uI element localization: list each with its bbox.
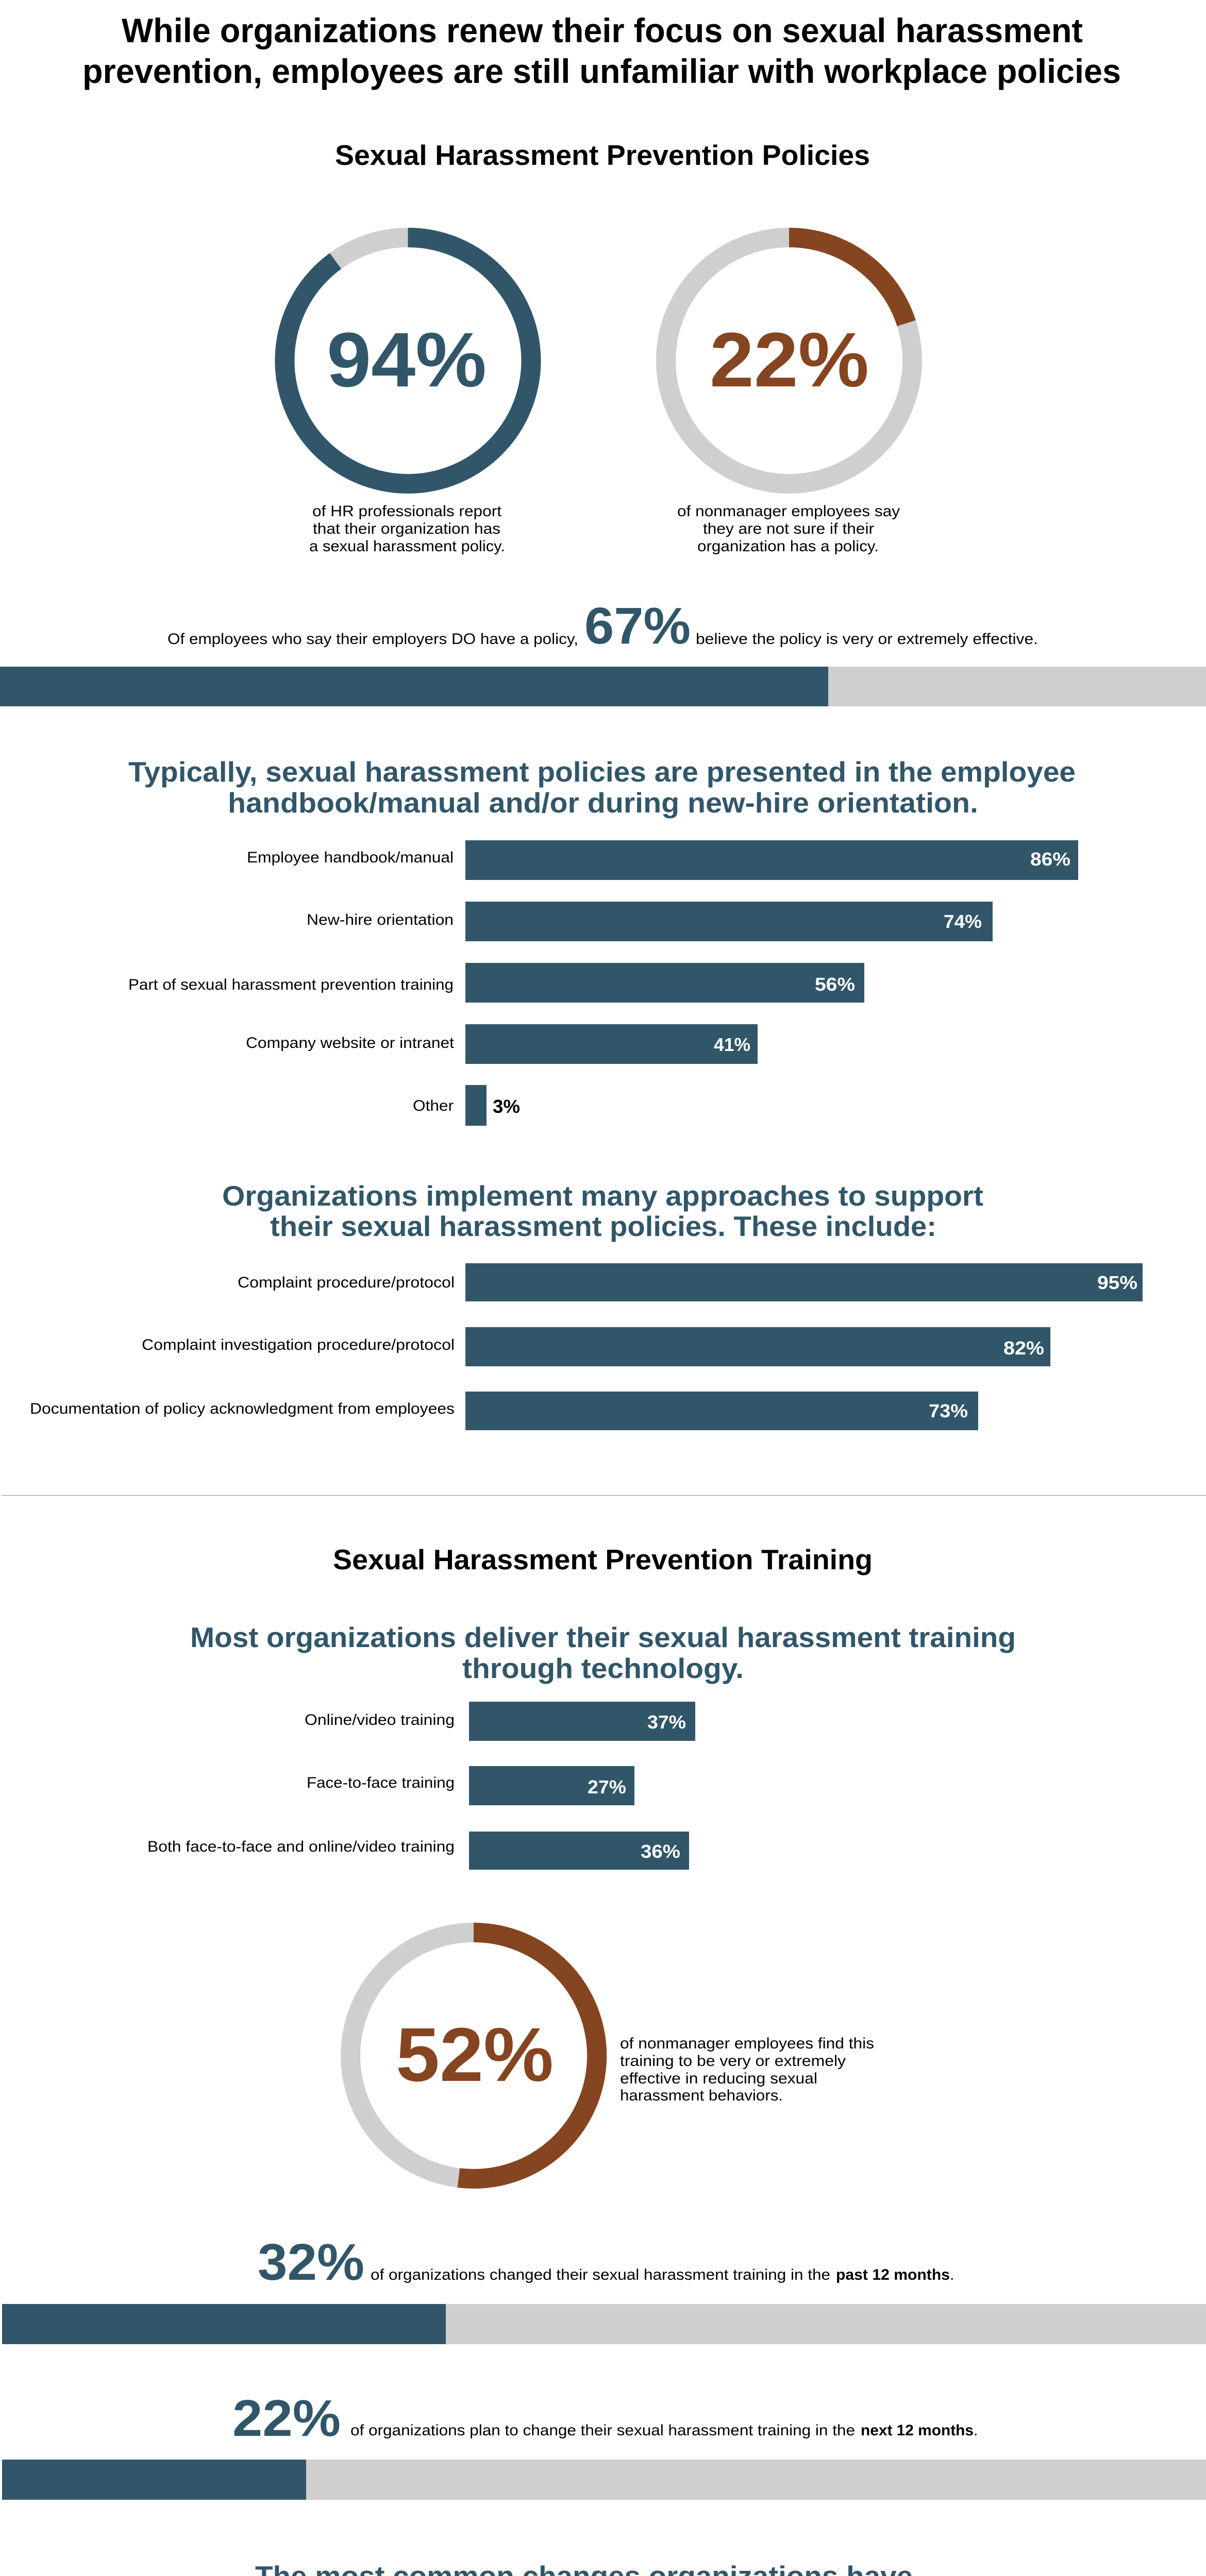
progress bar: 32% [2,2304,1206,2344]
heading: policy presentation: Typically, sexual harassment policies are presented in the employee [128,756,1076,788]
caption: 94% [309,503,505,555]
donut chart: 22% nonmanager employees: 22% [710,316,869,403]
heading: approaches: Organizations implement many approaches to support [222,1180,983,1212]
heading: training delivery: Most organizations deliver their sexual harassment training [190,1621,1016,1653]
heading: training delivery: through technology. [462,1652,744,1684]
bar: complaint investigation 82%: 82% [1003,1337,1044,1359]
bar: face-to-face 27%: Face-to-face training [307,1774,455,1791]
callout: 22% plan to change: of organizations plan to change their sexual harassment training in the [350,2422,855,2439]
caption: 94%: a sexual harassment policy. [309,538,505,555]
bar: both 36%: 36% [641,1841,680,1862]
donut chart: 94% HR professionals [284,238,531,484]
caption: 22% [677,503,900,555]
bar: online 37%: Online/video training [305,1711,455,1728]
donut chart: 52% training effective: 52% [396,2012,554,2097]
callout: 22% plan to change [232,2389,978,2447]
bar: complaint procedure 95% [238,1263,1143,1301]
caption: 94%: that their organization has [313,520,500,537]
bar: complaint procedure 95%: Complaint procedure/protocol [238,1274,455,1291]
heading: approaches [222,1180,983,1242]
heading: policy presentation [128,756,1076,819]
heading: training delivery [190,1621,1016,1684]
title: While organizations renew their focus on sexual harassment [122,11,1083,49]
callout: 67% policy effective: believe the policy is very or extremely effective. [696,631,1038,648]
bar: new-hire orientation 74%: 74% [944,911,982,932]
caption: 22%: they are not sure if their [703,520,874,537]
bar: company website 41% [246,1024,758,1064]
callout: 32% changed training: past 12 months [836,2266,950,2283]
callout: 22% plan to change: next 12 months [861,2422,974,2439]
bar: documentation 73% [30,1392,978,1430]
bar: face-to-face 27%: 27% [588,1776,626,1798]
bar: new-hire orientation 74%: New-hire orientation [307,911,454,928]
bar: company website 41%: 41% [714,1034,750,1055]
caption: 52%: training to be very or extremely [620,2053,846,2070]
progress bar: 22% [2,2460,1206,2500]
caption: 22%: organization has a policy. [697,538,879,555]
bar chart: how policies are presented [128,840,1078,1126]
bar: documentation 73%: 73% [929,1400,968,1421]
bar: online 37% [305,1702,695,1741]
donut chart: 22% nonmanager employees [666,238,912,484]
callout: 67% policy effective: 67% [584,597,691,655]
bar: complaint investigation 82% [142,1327,1050,1366]
bar: new-hire orientation 74% [307,902,993,941]
caption: 94%: of HR professionals report [312,503,502,520]
title: prevention, employees are still unfamiliar with workplace policies [82,52,1121,90]
callout: 32% changed training: of organizations changed their sexual harassment training in the [371,2266,830,2283]
bar: online 37%: 37% [647,1711,686,1733]
bar: prevention training 56% [128,963,864,1003]
heading: approaches: their sexual harassment policies. These include: [270,1210,936,1242]
donut chart: 94% HR professionals: 94% [327,316,487,403]
bar: both 36% [147,1832,689,1870]
caption: 22%: of nonmanager employees say [677,503,900,520]
callout: 32% changed training [258,2233,954,2291]
bar: other 3%: Other [413,1097,454,1114]
caption: 52%: of nonmanager employees find this [620,2035,874,2052]
bar: complaint procedure 95%: 95% [1097,1272,1137,1293]
callout: 32% changed training: . [950,2266,954,2283]
caption: 52%: harassment behaviors. [620,2087,783,2104]
bar: employee handbook 86%: Employee handbook/manual [247,849,454,866]
bar chart: approaches [30,1263,1143,1430]
caption: 52% [620,2035,874,2104]
bar: face-to-face 27% [307,1766,634,1805]
bar: prevention training 56%: 56% [815,974,855,995]
callout: 67% policy effective: Of employees who say their employers DO have a policy, [167,631,578,648]
bar chart: training delivery [147,1702,695,1870]
callout: 22% plan to change: 22% [232,2389,341,2447]
bar: other 3%: 3% [493,1096,520,1117]
bar: documentation 73%: Documentation of policy acknowledgment from employees [30,1400,455,1417]
callout: 32% changed training: 32% [258,2233,364,2291]
progress bar: 67% [0,667,1206,706]
caption: 52%: effective in reducing sexual [620,2070,817,2087]
bar: complaint investigation 82%: Complaint investigation procedure/protocol [142,1336,455,1353]
heading: policies section: Sexual Harassment Prevention Policies [335,139,870,171]
heading: policy presentation: handbook/manual and/or during new-hire orientation. [228,787,978,819]
bar: employee handbook 86%: 86% [1030,849,1070,870]
heading: training section: Sexual Harassment Prevention Training [333,1544,873,1575]
bar: other 3% [413,1085,520,1126]
callout: 67% policy effective [167,597,1038,655]
callout: 22% plan to change: . [974,2422,978,2439]
bar: company website 41%: Company website or intranet [246,1035,455,1052]
bar: prevention training 56%: Part of sexual harassment prevention training [128,976,454,993]
bar: employee handbook 86% [247,840,1078,880]
title [82,11,1121,90]
donut chart: 52% training effective [350,1933,597,2179]
bar: both 36%: Both face-to-face and online/video training [147,1838,455,1855]
